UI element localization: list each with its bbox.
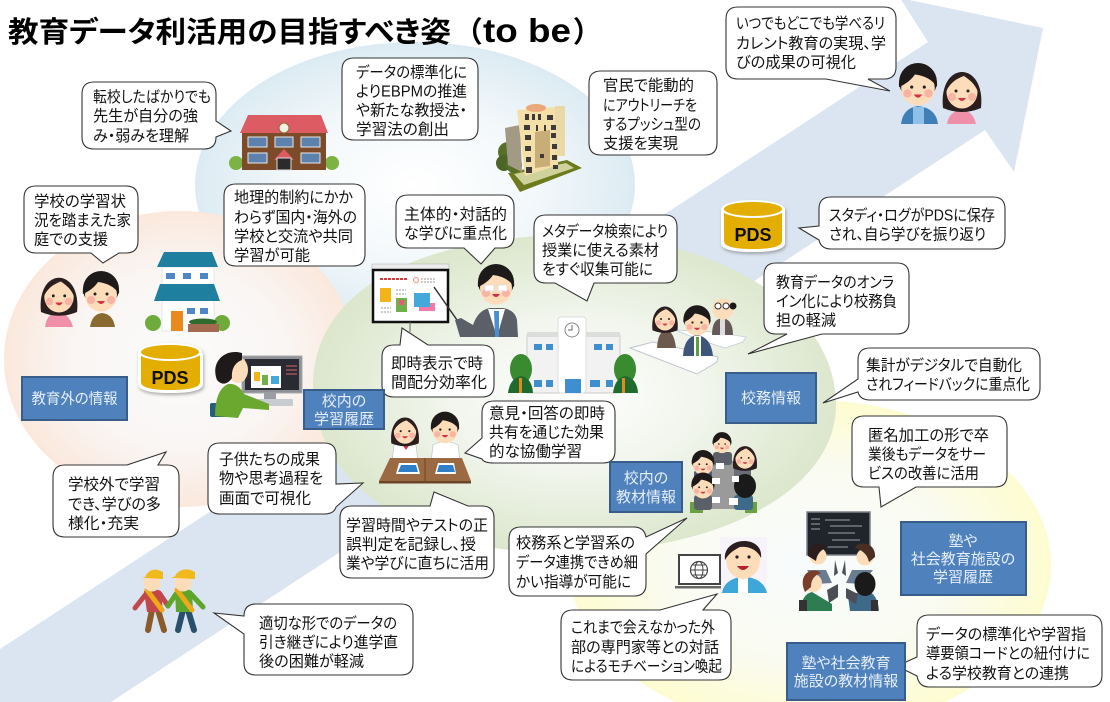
callout: push-style support (589, 71, 717, 155)
panel: peach circle, home (4, 211, 356, 507)
label box: cram school teaching materials: 塾や社会教育 (801, 655, 891, 672)
callout: home support: 庭での支援 (34, 230, 108, 248)
label box: cram school learning history: 社会教育施設の (911, 551, 1015, 568)
callout: data handover: 引き継ぎにより進学直 (259, 634, 398, 652)
callout: visualising outcomes: 画面で可視化 (219, 490, 311, 508)
icon: couple of adult learners (899, 63, 981, 124)
label box: cram school teaching materials (787, 643, 905, 700)
callout: transfer student (82, 82, 231, 149)
callout: push-style support: にアウトリーチを (603, 96, 697, 114)
callout: active learning: 主体的・対話的 (404, 206, 507, 224)
callout: online school affairs: 教育データのオンラ (776, 272, 894, 292)
title: to be (483, 12, 571, 49)
icon: presentation screen (372, 264, 457, 332)
callout: automatic aggregation: されフィードバックに重点化 (866, 376, 1030, 394)
callout: curriculum code: よる学校教育との連携 (926, 664, 1069, 682)
label box: school teaching materials (610, 462, 682, 512)
callout: collaborative learning: 的な協働学習 (489, 442, 582, 460)
callout: push-style support: するプッシュ型の (603, 116, 701, 134)
callout: online school affairs: イン化により校務負 (776, 292, 897, 310)
callout: collaborative learning (465, 401, 615, 463)
callout: real-time display: 即時表示で時 (391, 354, 483, 372)
callout: transfer student: み・弱みを理解 (93, 127, 189, 145)
callout: study log: スタディ・ログがPDSに保存 (829, 206, 995, 224)
label box: non-education information: 教育外の情報 (32, 390, 118, 408)
callout: push-style support: 官民で能動的 (603, 76, 694, 94)
icon: central school building (508, 317, 638, 393)
callout: recurrent education: いつでもどこでも学べるリ (736, 14, 885, 32)
label box: school learning history: 校内の (322, 393, 366, 410)
callout: automatic aggregation: 集計がデジタルで自動化 (866, 356, 1022, 374)
icon: online expert with laptop (675, 537, 767, 593)
label box: cram school teaching materials: 施設の教材情報 (794, 673, 898, 690)
callout: transfer student: 先生が自分の強 (93, 107, 198, 125)
callout: metadata search: メタデータ検索により (542, 222, 668, 240)
callout: study log (799, 197, 1005, 249)
panel: blue circle, public and national (195, 42, 635, 328)
callout: detailed guidance (509, 518, 687, 596)
callout: remote exchange: 学校と交流や共同 (234, 228, 353, 246)
callout: home support: 学校の学習状 (34, 192, 126, 210)
callout: data standardisation: よりEBPMの推進 (356, 82, 467, 100)
label box: cram school learning history: 学習履歴 (933, 569, 993, 586)
title (8, 12, 589, 49)
callout: automatic aggregation (823, 348, 1040, 403)
icon: PDS cylinder, upper: PDS (734, 225, 772, 245)
callout: detailed guidance: かい指導が可能に (516, 573, 631, 591)
callout: real-time display: 間配分効率化 (391, 374, 487, 392)
callout: visualising outcomes (208, 443, 363, 514)
icon: group working with a big screen (799, 512, 879, 611)
label box: school teaching materials: 校内の (624, 470, 668, 487)
callout: test records: 誤判定を記録し、授 (346, 536, 476, 554)
callout: home support (24, 186, 138, 263)
callout: data standardisation: 学習法の創出 (356, 120, 449, 138)
icon: staff in a meeting (630, 298, 746, 374)
callout: collaborative learning: 意見・回答の即時 (489, 404, 605, 422)
callout: outside experts (561, 594, 731, 680)
title: ） (574, 17, 589, 49)
callout: transfer student: 転校したばかりでも (93, 88, 211, 106)
callout: data handover (214, 604, 413, 675)
callout: visualising outcomes: 物や思考過程を (219, 470, 323, 488)
callout: collaborative learning: 共有を通じた効果 (489, 424, 604, 442)
label box: school affairs information (726, 373, 816, 423)
callout: home support: 況を踏まえた家 (34, 212, 131, 230)
callout: remote exchange: 学習が可能 (234, 246, 310, 264)
title: （ (467, 17, 482, 49)
callout: curriculum code: データの標準化や学習指 (926, 624, 1086, 644)
callout: remote exchange: 地理的制約にかか (234, 188, 353, 206)
callout: data standardisation: データの標準化に (356, 62, 467, 82)
callout: learning outside school: 学校外で学習 (68, 476, 160, 494)
callout: data handover: 適切な形でのデータの (259, 614, 397, 632)
callout: test records: 学習時間やテストの正 (346, 516, 488, 534)
callout: anonymised data: 業後もデータをサー (868, 444, 986, 464)
panel: yellow circle, outside-school education (569, 400, 1051, 702)
callout: curriculum code (897, 615, 1102, 687)
label box: non-education information (22, 377, 127, 420)
callout: active learning (396, 195, 514, 264)
callout: detailed guidance: 校務系と学習系の (516, 534, 635, 552)
callout: metadata search (534, 215, 677, 301)
callout: recurrent education (726, 7, 896, 91)
icon: apartment building (496, 104, 582, 192)
callout: data standardisation (342, 58, 478, 140)
panel: green circle, school (313, 235, 836, 553)
callout: learning outside school: でき、学びの多 (68, 496, 161, 514)
label box: cram school learning history: 塾や (948, 533, 978, 550)
callout: anonymised data: 匿名加工の形で卒 (868, 426, 989, 444)
icon: teachers around a table (690, 432, 757, 513)
callout: anonymised data (852, 416, 1007, 507)
label box: cram school learning history (901, 522, 1026, 595)
icon: person using a computer (210, 352, 302, 418)
callout: outside experts: によるモチベーション喚起 (571, 658, 722, 676)
label box: school learning history (304, 390, 384, 429)
callout: active learning: な学びに重点化 (404, 224, 507, 242)
callout: real-time display (382, 328, 494, 397)
icon: brown school building (229, 115, 339, 170)
icon: two children walking (135, 569, 203, 630)
callout: remote exchange (224, 184, 365, 266)
icon: PDS cylinder, lower (138, 343, 203, 393)
callout: detailed guidance: データ連携できめ細 (516, 552, 638, 572)
label box: school learning history: 学習履歴 (314, 411, 374, 428)
icon: family home (145, 252, 230, 332)
callout: outside experts: これまで会えなかった外 (571, 618, 715, 636)
icon: parents couple (41, 271, 119, 327)
label box: school teaching materials: 教材情報 (616, 489, 676, 506)
icon: two students with tablets (379, 412, 471, 484)
callout: learning outside school (53, 452, 179, 537)
callout: online school affairs (748, 263, 909, 354)
icon: teacher with pointer (455, 264, 518, 337)
callout: metadata search: をすぐ収集可能に (542, 260, 653, 278)
callout: test records: 業や学びに直ちに活用 (346, 554, 489, 572)
callout: learning outside school: 様化・充実 (68, 514, 139, 532)
callout: data handover: 後の困難が軽減 (259, 652, 364, 670)
callout: data standardisation: や新たな教授法・ (356, 102, 467, 120)
callout: outside experts: 部の専門家等との対話 (571, 638, 719, 656)
callout: metadata search: 授業に使える素材 (542, 242, 659, 260)
callout: recurrent education: カレント教育の実現、学 (736, 34, 886, 52)
icon: PDS cylinder, upper (721, 200, 785, 252)
callout: recurrent education: びの成果の可視化 (736, 54, 856, 72)
callout: online school affairs: 担の軽減 (776, 312, 836, 330)
callout: test records (340, 492, 494, 578)
title: 教育データ利活用の目指すべき姿 (8, 15, 451, 49)
callout: push-style support: 支援を実現 (603, 134, 678, 152)
callout: curriculum code: 導要領コードとの紐付けに (926, 644, 1090, 662)
callout: remote exchange: わらず国内・海外の (234, 208, 357, 226)
callout: study log: され、自ら学びを振り返り (829, 226, 986, 244)
callout: visualising outcomes: 子供たちの成果 (219, 450, 320, 468)
icon: PDS cylinder, lower: PDS (151, 368, 189, 388)
label box: school affairs information: 校務情報 (741, 390, 801, 407)
callout: anonymised data: ビスの改善に活用 (868, 464, 979, 482)
